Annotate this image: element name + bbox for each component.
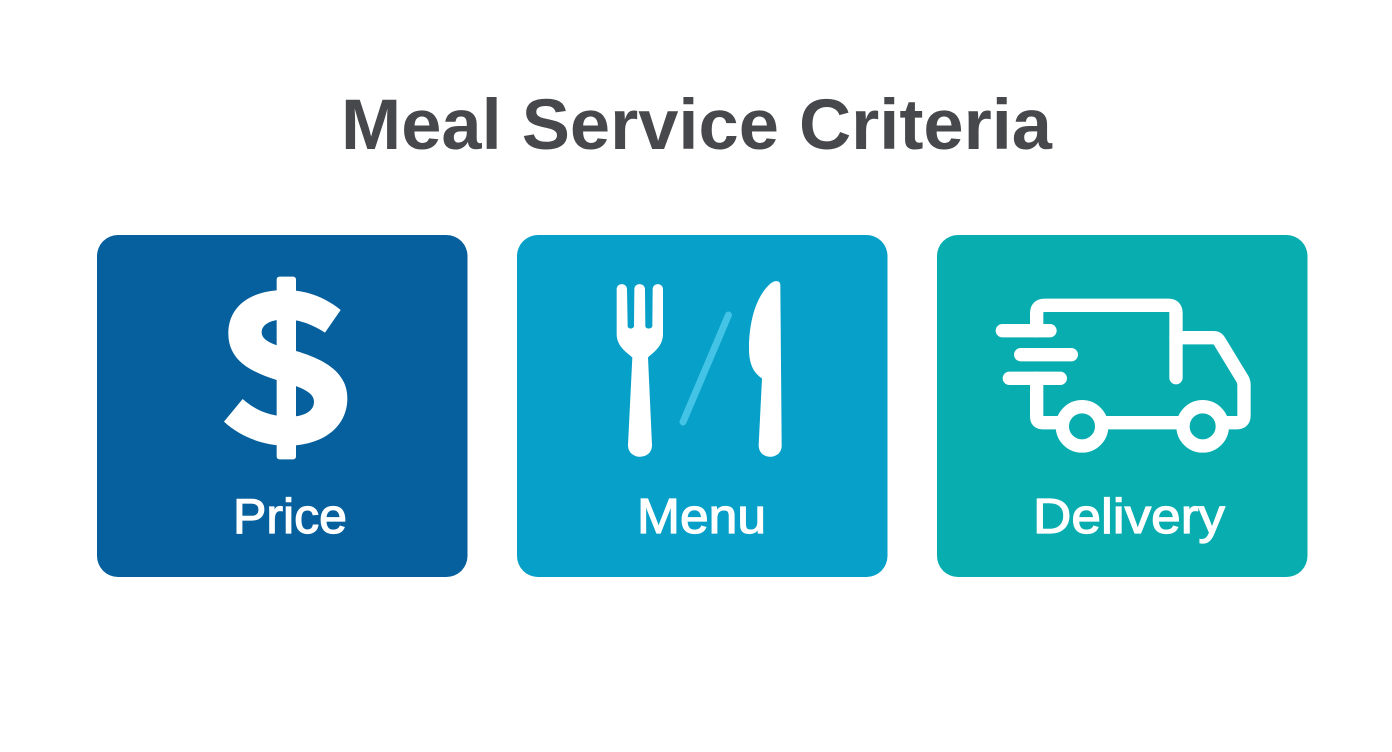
label: menu: Menu [637, 490, 766, 544]
icon: fork [617, 284, 663, 457]
price card background [97, 235, 468, 577]
label: price: Price [233, 490, 347, 544]
delivery card background [937, 235, 1308, 577]
label: delivery: Delivery [1033, 490, 1226, 544]
panel: delivery [937, 235, 1308, 577]
panel: price [97, 235, 468, 577]
title: Meal Service Criteria [341, 86, 1053, 165]
icon: divider slash [683, 315, 728, 422]
icon: dollar sign [224, 277, 347, 459]
icon: delivery truck [1002, 305, 1244, 446]
icon: knife [749, 281, 782, 457]
menu card background [517, 235, 888, 577]
panel: menu [517, 235, 888, 577]
